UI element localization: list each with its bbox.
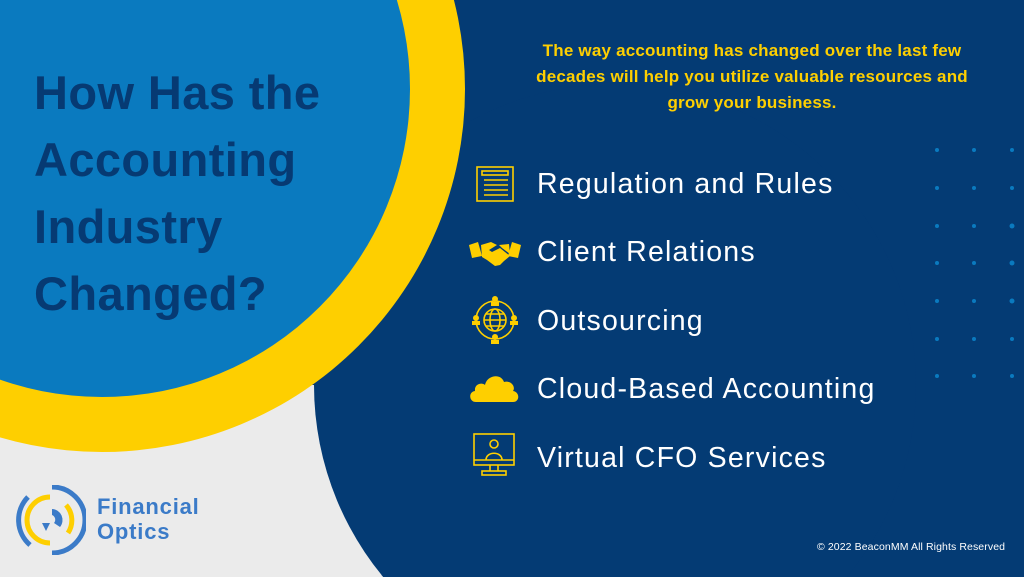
icon: globe network	[472, 296, 518, 344]
icon: handshake	[469, 242, 521, 266]
title: Accounting	[34, 133, 296, 186]
item: virtual cfo: Virtual CFO Services	[537, 442, 827, 474]
intro text: grow your business.	[667, 93, 837, 112]
item: regulation: Regulation and Rules	[537, 168, 834, 200]
logo text: Financial	[97, 494, 200, 519]
logo text	[97, 494, 200, 544]
intro text: The way accounting has changed over the last few	[543, 41, 961, 60]
logo	[16, 485, 200, 555]
title: Industry	[34, 200, 223, 253]
copyright: © 2022 BeaconMM All Rights Reserved	[817, 541, 1005, 553]
title	[34, 66, 320, 320]
item: outsourcing: Outsourcing	[537, 305, 704, 337]
item: client relations: Client Relations	[537, 236, 756, 268]
intro text	[536, 41, 968, 112]
icon: cloud	[470, 376, 518, 402]
icon: document	[476, 166, 514, 202]
icon: monitor person	[473, 433, 515, 476]
intro text: decades will help you utilize valuable resources and	[536, 67, 968, 86]
icon: logo mark	[16, 485, 86, 555]
title: Changed?	[34, 267, 267, 320]
logo text: Optics	[97, 519, 170, 544]
item: cloud accounting: Cloud-Based Accounting	[537, 373, 876, 405]
title: How Has the	[34, 66, 320, 119]
